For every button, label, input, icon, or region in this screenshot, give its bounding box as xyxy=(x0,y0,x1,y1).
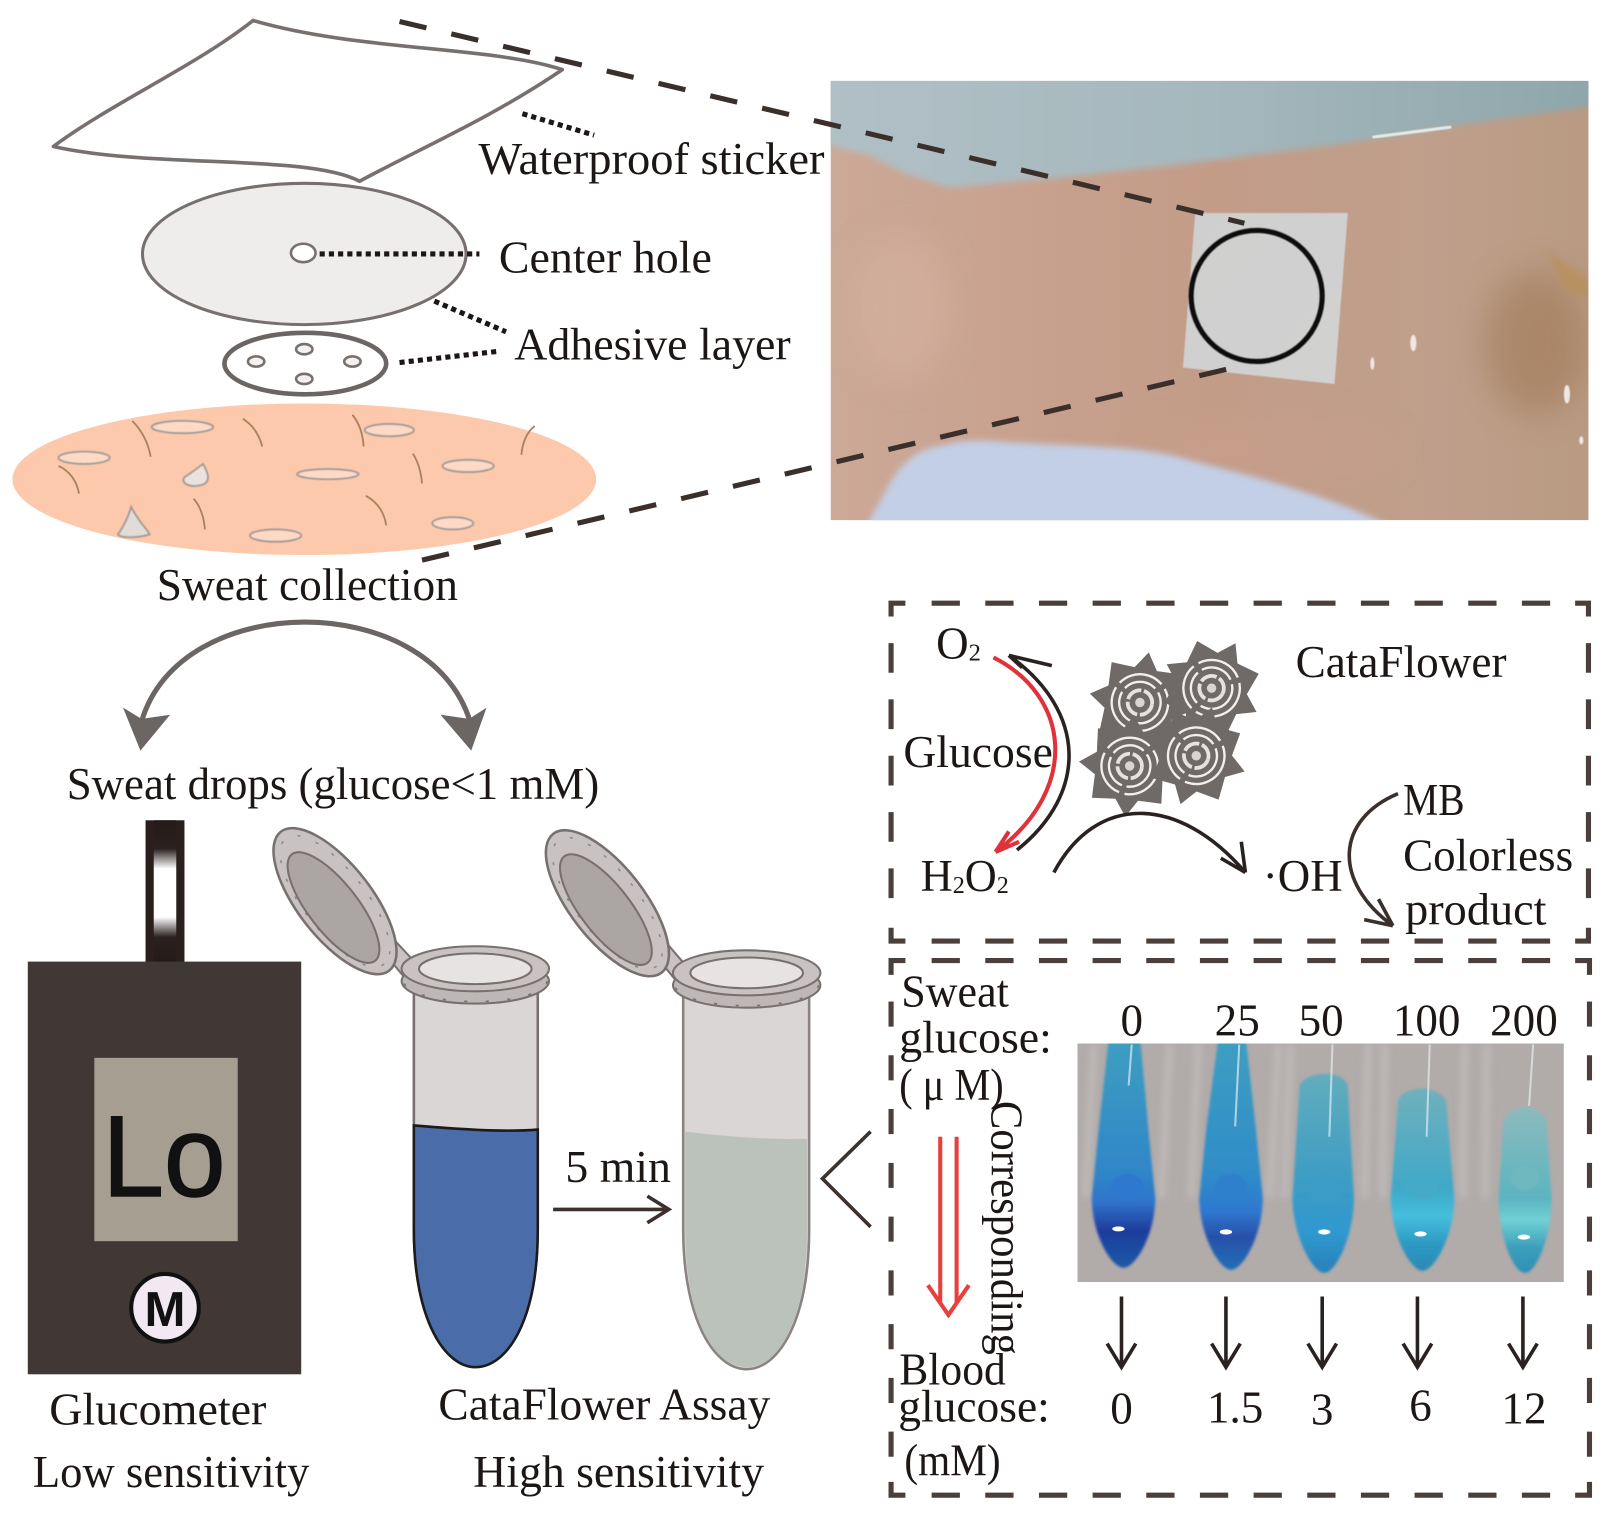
arrow: O2 to H2O2 red xyxy=(993,657,1055,852)
label: Corresponding: Corresponding xyxy=(981,1101,1031,1355)
arrow: H2O2 to OH xyxy=(1054,813,1245,873)
arrow: H2O2 to O2 black xyxy=(1009,655,1069,850)
Glucose label: Glucose xyxy=(903,727,1053,777)
adhesive layer disc with center hole xyxy=(142,183,466,325)
arrow: 5 min xyxy=(553,1196,669,1223)
sweat glucose values: 100 xyxy=(1393,995,1460,1045)
label: Center hole: Center hole xyxy=(499,232,712,282)
sweat glucose values: 0 xyxy=(1120,995,1143,1045)
sweat glucose values: 200 xyxy=(1490,995,1558,1045)
label: Sweat glucose: glucose: xyxy=(899,1013,1052,1063)
Colorless label: Colorless xyxy=(1403,830,1573,880)
blood glucose values: 1.5 xyxy=(1207,1382,1263,1432)
sweat glucose values xyxy=(1120,995,1558,1045)
label: Blood glucose xyxy=(898,1345,1050,1486)
label: 5 min: 5 min xyxy=(565,1142,671,1192)
label: Blood glucose: Blood xyxy=(899,1345,1006,1395)
label: Blood glucose: (mM) xyxy=(904,1436,1001,1486)
tube: pale after reaction xyxy=(524,811,820,1369)
small perforated disc xyxy=(224,333,386,394)
tube: blue before reaction xyxy=(252,809,549,1367)
blood glucose values: 0 xyxy=(1110,1383,1133,1433)
dotted leader lines xyxy=(320,114,594,363)
skin with sweat glands xyxy=(12,403,596,555)
chevron pointer xyxy=(822,1132,871,1227)
H2O2 label: 2 xyxy=(953,872,965,899)
MB label: MB xyxy=(1403,775,1465,825)
label: Sweat glucose xyxy=(899,967,1052,1110)
label: Blood glucose: glucose: xyxy=(898,1381,1050,1431)
label: Waterproof sticker: Waterproof sticker xyxy=(478,134,825,184)
photo: arm with patch xyxy=(819,72,1598,527)
double curved arrow xyxy=(123,622,487,751)
zoom connector lines xyxy=(400,22,1244,560)
arrows: sweat to blood xyxy=(1107,1296,1537,1367)
arrow: red double xyxy=(928,1137,969,1315)
H2O2 label: O xyxy=(965,851,997,901)
blood glucose values: 3 xyxy=(1311,1384,1333,1434)
label: Glucometer: Glucometer xyxy=(49,1384,266,1434)
label: Sweat drops: Sweat drops (glucose<1 mM) xyxy=(67,759,599,809)
arrow: MB to colorless product xyxy=(1349,794,1398,926)
label: Sweat glucose: ( μ M) xyxy=(899,1060,1004,1110)
label: Sweat collection: Sweat collection xyxy=(157,560,458,610)
blood glucose values: 6 xyxy=(1409,1380,1432,1430)
icon: CataFlower particles xyxy=(1075,619,1280,821)
label: Adhesive layer: Adhesive layer xyxy=(514,319,791,369)
O2 label: 2 xyxy=(969,640,981,667)
H2O2 label: 2 xyxy=(997,872,1009,899)
label: High sensitivity: High sensitivity xyxy=(473,1447,765,1497)
blood glucose values: 12 xyxy=(1501,1383,1546,1433)
glucometer xyxy=(28,820,301,1374)
sweat glucose values: 25 xyxy=(1215,995,1260,1045)
label: Low sensitivity: Low sensitivity xyxy=(33,1447,310,1497)
blood glucose values xyxy=(1110,1380,1546,1434)
label: CataFlower Assay: CataFlower Assay xyxy=(438,1379,771,1429)
H2O2 label: H xyxy=(921,851,953,901)
waterproof sticker sheet xyxy=(53,20,562,181)
sweat glucose values: 50 xyxy=(1299,995,1344,1045)
CataFlower label: CataFlower xyxy=(1296,637,1507,687)
label: Sweat glucose: Sweat xyxy=(901,967,1009,1017)
panel: sweat vs blood glucose xyxy=(891,961,1589,1495)
O2 label: O xyxy=(936,618,969,668)
glucometer: M xyxy=(145,1283,185,1337)
product label: product xyxy=(1405,885,1547,935)
glucometer: Lo xyxy=(103,1093,225,1221)
photo: colorimetric tubes xyxy=(1077,1034,1564,1282)
panel: reaction mechanism xyxy=(891,603,1588,941)
OH radical label: ·OH xyxy=(1263,851,1343,901)
